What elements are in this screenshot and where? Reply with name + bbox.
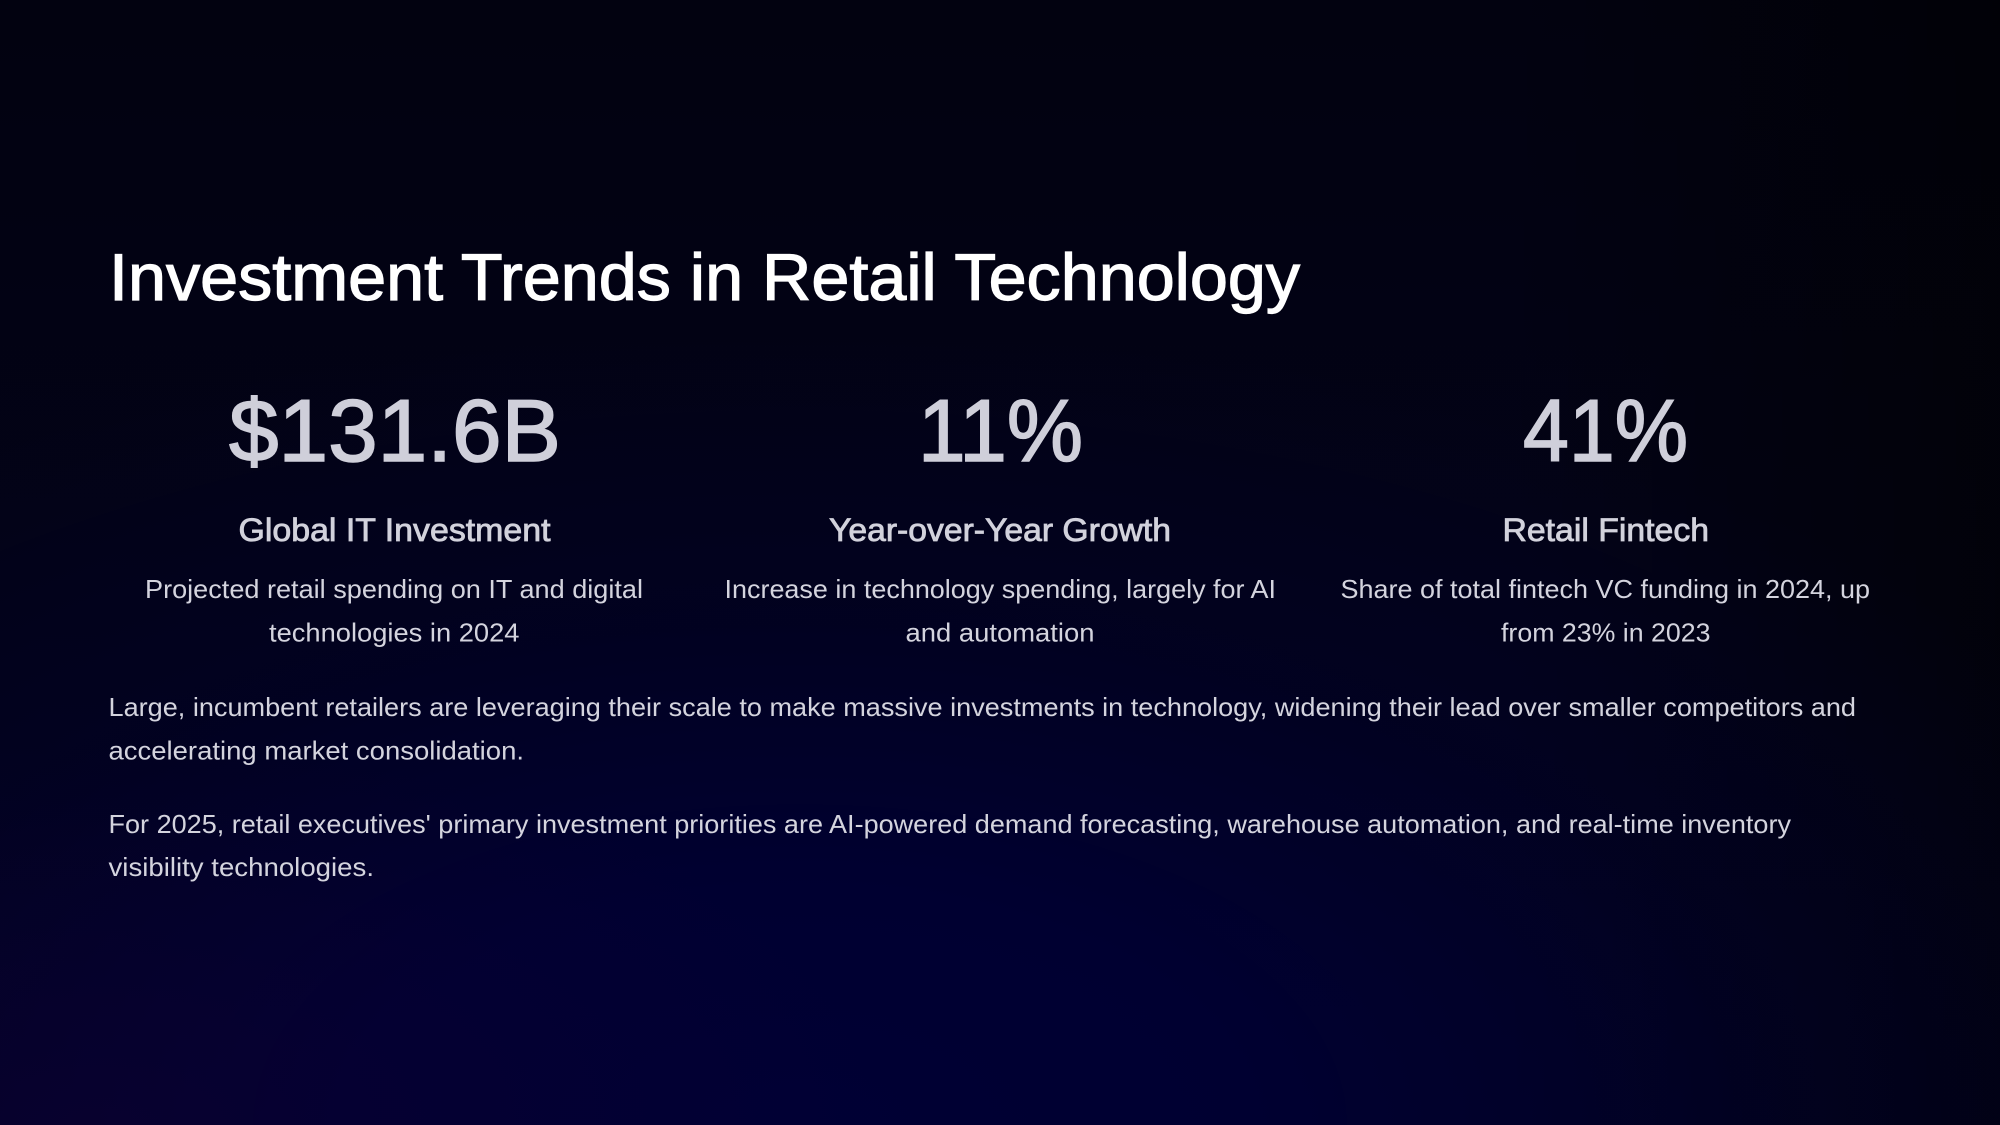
stat description: Share of total fintech VC funding in 2024, up [1340, 574, 1870, 604]
paragraph: market consolidation: accelerating market consolidation. [108, 736, 524, 766]
stat value: 11%: 11% [918, 381, 1083, 480]
stat description [1340, 574, 1870, 648]
stat description: from 23% in 2023 [1501, 618, 1710, 648]
paragraph: market consolidation [108, 692, 1856, 766]
stat description [724, 574, 1276, 648]
stat description: Increase in technology spending, largely for AI [724, 574, 1276, 604]
stat description: and automation [906, 618, 1094, 648]
title: Investment Trends in Retail Technology [109, 240, 1300, 314]
stat description [145, 574, 643, 648]
stat label: Retail Fintech: Retail Fintech [1502, 512, 1709, 548]
panel: year-over-year growth stat [724, 381, 1276, 648]
paragraph: 2025 investment priorities: For 2025, retail executives' primary investment priorities are AI-powered demand forecasting, warehouse automation, and real-time inventory [108, 809, 1791, 839]
paragraph: 2025 investment priorities [108, 809, 1791, 882]
stat description: technologies in 2024 [269, 618, 520, 648]
paragraph: market consolidation: Large, incumbent retailers are leveraging their scale to make massive investments in technology, widening their lead over smaller competitors and [108, 692, 1856, 722]
panel: retail fintech stat [1340, 381, 1870, 648]
stat description: Projected retail spending on IT and digital [145, 574, 643, 604]
paragraph: 2025 investment priorities: visibility technologies. [108, 852, 374, 882]
stat label: Global IT Investment: Global IT Investment [238, 512, 551, 548]
stat value: $131.6B: $131.6B [229, 381, 561, 480]
panel: global IT investment stat [145, 381, 643, 648]
stat value: 41%: 41% [1523, 381, 1688, 480]
stat label: Year-over-Year Growth: Year-over-Year Growth [829, 512, 1171, 548]
